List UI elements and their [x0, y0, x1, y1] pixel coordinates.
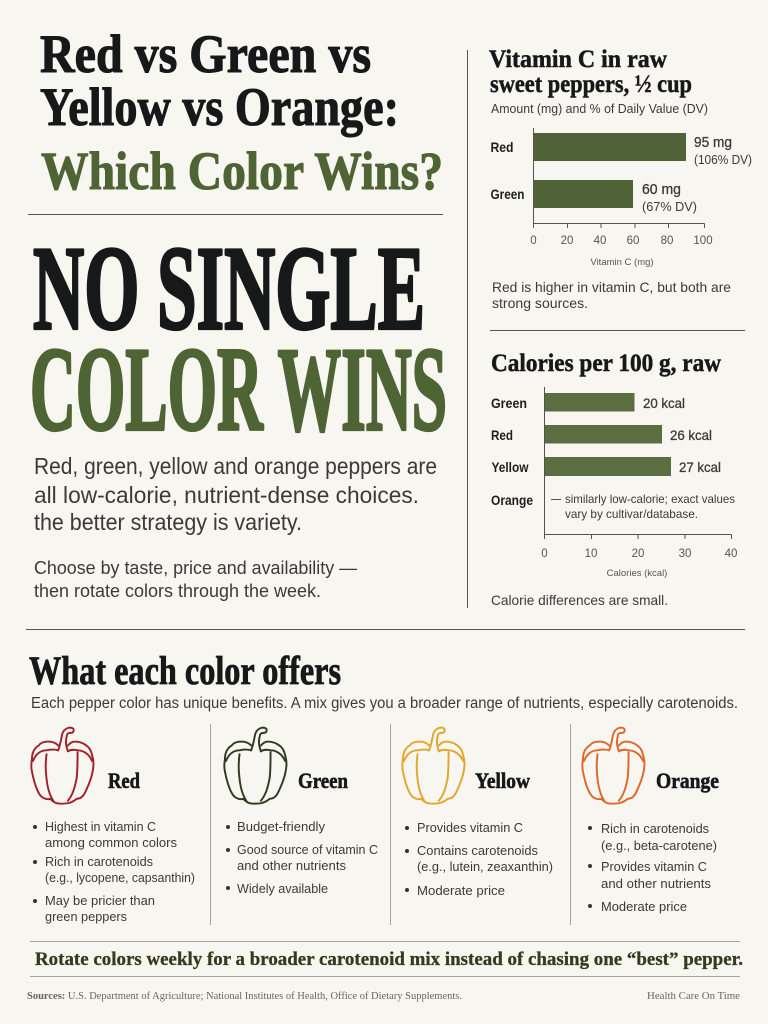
icon: green pepper	[224, 728, 286, 804]
bullet list: Contains carotenoids	[417, 843, 538, 858]
bullet list: (e.g., lutein, zeaxanthin)	[417, 859, 553, 874]
summary text: the better strategy is variety.	[34, 509, 302, 535]
chart heading	[489, 46, 708, 116]
bar chart: 20	[561, 235, 573, 247]
bar chart	[490, 128, 752, 268]
bar chart: 10	[585, 548, 597, 560]
chart caption	[492, 279, 731, 311]
bar chart: 100	[693, 235, 713, 247]
bullet list: Highest in vitamin C	[45, 819, 156, 834]
sources: Sources: U.S. Department of Agriculture; National Institutes of Health, Office of Dietary Supplements.	[27, 991, 462, 1002]
bar chart: Red	[491, 427, 513, 443]
chart heading: Vitamin C in raw	[489, 46, 667, 73]
title: Yellow vs Orange:	[40, 77, 399, 137]
bar chart: 95 mg	[694, 134, 732, 151]
panel: calories chart	[491, 350, 737, 608]
section heading: Each pepper color has unique benefits. A mix gives you a broader range of nutrients, especially carotenoids.	[31, 695, 738, 712]
bullet list	[405, 820, 553, 898]
bullet list: and other nutrients	[601, 876, 712, 891]
chart caption: Red is higher in vitamin C, but both are	[492, 279, 731, 295]
panel: green pepper	[224, 728, 378, 896]
chart heading: Amount (mg) and % of Daily Value (DV)	[491, 101, 708, 116]
bullet list: Moderate price	[417, 883, 505, 898]
bar chart: 27 kcal	[679, 459, 721, 475]
bullet list	[33, 819, 195, 924]
summary text: Red, green, yellow and orange peppers are	[34, 453, 437, 479]
bar chart: Green	[491, 395, 527, 411]
bar chart: (106% DV)	[694, 152, 752, 167]
title: Red vs Green vs	[40, 24, 371, 84]
label: green: Green	[298, 768, 348, 793]
bar chart: vary by cultivar/database.	[565, 507, 698, 521]
bar chart: 0	[530, 235, 537, 247]
bar chart: Red	[490, 139, 514, 155]
bar chart: Yellow	[492, 459, 529, 475]
bullet list: Good source of vitamin C	[237, 842, 378, 857]
bar chart: Calories (kcal)	[607, 568, 667, 579]
icon: orange pepper	[582, 728, 644, 804]
bullet list	[226, 819, 378, 896]
brand: Health Care On Time	[647, 990, 740, 1002]
icon: yellow pepper	[402, 728, 464, 804]
chart caption: strong sources.	[492, 295, 588, 311]
bullet list: (e.g., lycopene, capsanthin)	[45, 870, 195, 885]
bullet list	[588, 821, 717, 914]
bar chart: (67% DV)	[642, 199, 697, 214]
panel: orange pepper	[582, 728, 719, 914]
bullet list: among common colors	[45, 835, 177, 850]
panel: yellow pepper	[402, 728, 553, 898]
bullet list: Rich in carotenoids	[601, 821, 709, 836]
bullet list: Moderate price	[601, 899, 687, 914]
bar chart	[491, 387, 737, 579]
title: Which Color Wins?	[41, 141, 443, 201]
callout: Rotate colors weekly for a broader carotenoid mix instead of chasing one “best” pepper.	[35, 949, 743, 970]
headline: NO SINGLE	[33, 222, 425, 354]
bar chart: Green	[490, 186, 524, 202]
advice text: Choose by taste, price and availability —	[34, 557, 357, 578]
bullet list: Widely available	[237, 881, 328, 896]
bar chart: 40	[725, 548, 737, 560]
bullet list: and other nutrients	[237, 858, 347, 873]
chart caption: Calorie differences are small.	[491, 592, 668, 608]
advice text: then rotate colors through the week.	[34, 580, 321, 601]
label: orange: Orange	[656, 768, 719, 793]
summary text	[34, 453, 437, 535]
bullet list: (e.g., beta-carotene)	[601, 838, 717, 853]
bar chart: 40	[594, 235, 606, 247]
bar chart: 30	[679, 548, 691, 560]
bar chart: 0	[541, 548, 548, 560]
bar chart: 20	[632, 548, 644, 560]
label: yellow: Yellow	[475, 768, 530, 793]
chart heading: Calories per 100 g, raw	[491, 350, 721, 377]
bar chart: 26 kcal	[670, 427, 712, 443]
bar chart: Orange	[491, 492, 533, 508]
chart heading: sweet peppers, ½ cup	[490, 71, 692, 98]
section heading: What each color offers	[29, 648, 341, 693]
bar chart: similarly low-calorie; exact values	[565, 492, 735, 506]
advice text	[34, 557, 357, 601]
summary text: all low-calorie, nutrient-dense choices.	[34, 482, 419, 508]
panel: red pepper	[31, 728, 195, 924]
title	[40, 24, 443, 201]
bullet list: Rich in carotenoids	[45, 854, 153, 869]
bar chart: 80	[661, 235, 673, 247]
panel: vitamin C chart	[489, 46, 752, 311]
icon: red pepper	[31, 728, 93, 804]
bar chart: 20 kcal	[643, 395, 685, 411]
bar chart: 60 mg	[642, 181, 681, 198]
bullet list: Provides vitamin C	[417, 820, 523, 835]
bar chart: Vitamin C (mg)	[590, 257, 654, 268]
label: red: Red	[108, 768, 140, 793]
headline	[30, 222, 447, 456]
bullet list: green peppers	[45, 909, 127, 924]
section heading	[29, 648, 738, 712]
bar chart: 60	[627, 235, 639, 247]
bullet list: May be pricier than	[45, 893, 155, 908]
bullet list: Budget-friendly	[237, 819, 325, 834]
bullet list: Provides vitamin C	[601, 859, 707, 874]
